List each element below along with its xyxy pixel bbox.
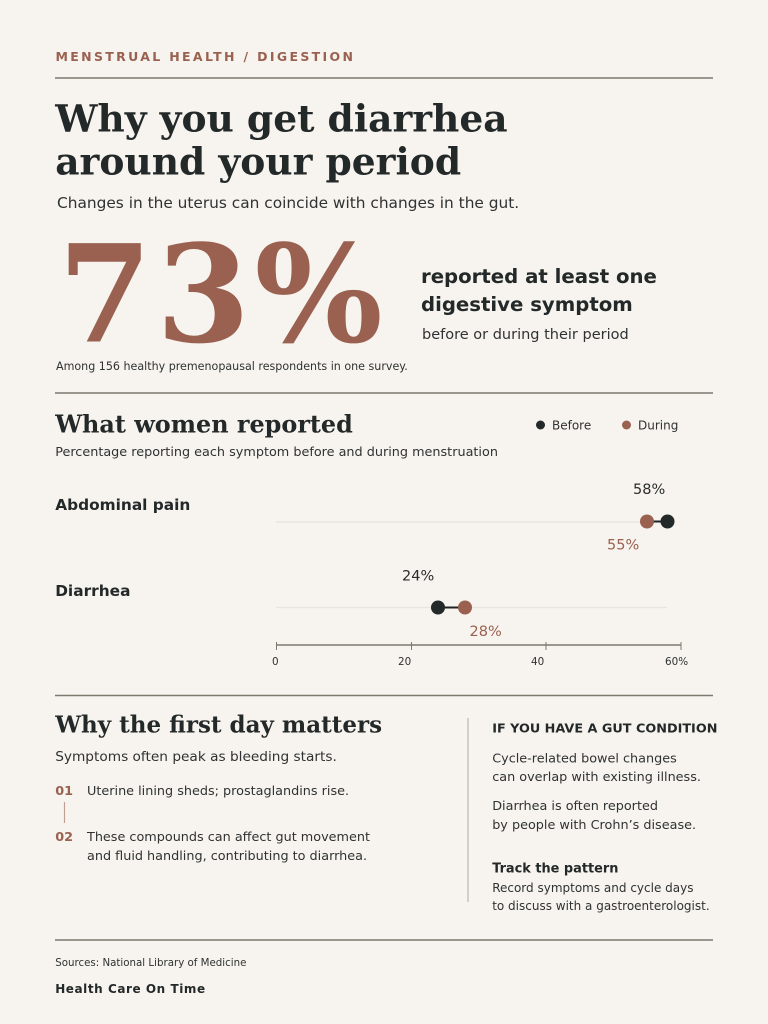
section heading: why the first day matters: Why the first day matters [54,712,382,739]
legend: Before [552,418,591,432]
title: around your period [55,139,461,183]
row: diarrhea: 28% [470,624,502,640]
axis [272,642,688,668]
row: diarrhea: 24% [402,568,434,584]
sidebar: track the pattern [492,862,710,913]
stat description: reported at least one [421,265,657,288]
brand: Health Care On Time [55,982,206,996]
big stat 73%: 73% [58,214,387,374]
sidebar: gut condition [492,722,717,833]
step 01: 01 [55,784,73,799]
row: abdominal pain: 55% [607,538,639,554]
step 02: These compounds can affect gut movement [86,830,370,845]
step 02: and fluid handling, contributing to diarrhea. [87,849,367,864]
chart subtitle: Percentage reporting each symptom before and during menstruation [55,445,498,460]
axis: 40 [531,656,544,668]
sidebar: gut condition: by people with Crohn’s disease. [492,818,696,833]
legend: During [638,418,678,432]
sidebar: track the pattern: to discuss with a gastroenterologist. [492,899,710,913]
row: diarrhea: Diarrhea [55,582,130,600]
axis: 20 [398,656,411,668]
step 01: Uterine lining sheds; prostaglandins rise. [87,784,349,799]
sources: Sources: National Library of Medicine [55,957,246,969]
axis: 0 [272,656,279,668]
stat description: before or during their period [422,327,629,343]
dumbbell chart [55,482,688,668]
sidebar: gut condition: IF YOU HAVE A GUT CONDITION [492,722,717,736]
stat footnote: Among 156 healthy premenopausal respondents in one survey. [56,360,408,373]
row: abdominal pain: Abdominal pain [55,496,190,514]
axis: 60% [665,656,688,668]
row: abdominal pain: 58% [633,482,665,498]
title [54,96,508,183]
section intro: Symptoms often peak as bleeding starts. [55,749,337,765]
sidebar: track the pattern: Record symptoms and cycle days [492,881,693,895]
legend [536,418,678,432]
row: diarrhea [55,568,667,640]
step 02 [55,830,370,864]
step 02: 02 [55,830,73,845]
eyebrow label: MENSTRUAL HEALTH / DIGESTION [56,49,355,64]
sidebar: gut condition: Cycle-related bowel changes [492,752,677,766]
row: abdominal pain [55,482,674,554]
sidebar: gut condition: can overlap with existing illness. [492,770,701,785]
stat description: digestive symptom [421,293,633,316]
subtitle: Changes in the uterus can coincide with changes in the gut. [57,194,519,212]
stat description [421,265,657,343]
section heading: what women reported: What women reported [54,411,353,439]
sidebar: track the pattern: Track the pattern [492,862,618,876]
sidebar: gut condition: Diarrhea is often reported [492,799,658,814]
title: Why you get diarrhea [54,96,508,140]
